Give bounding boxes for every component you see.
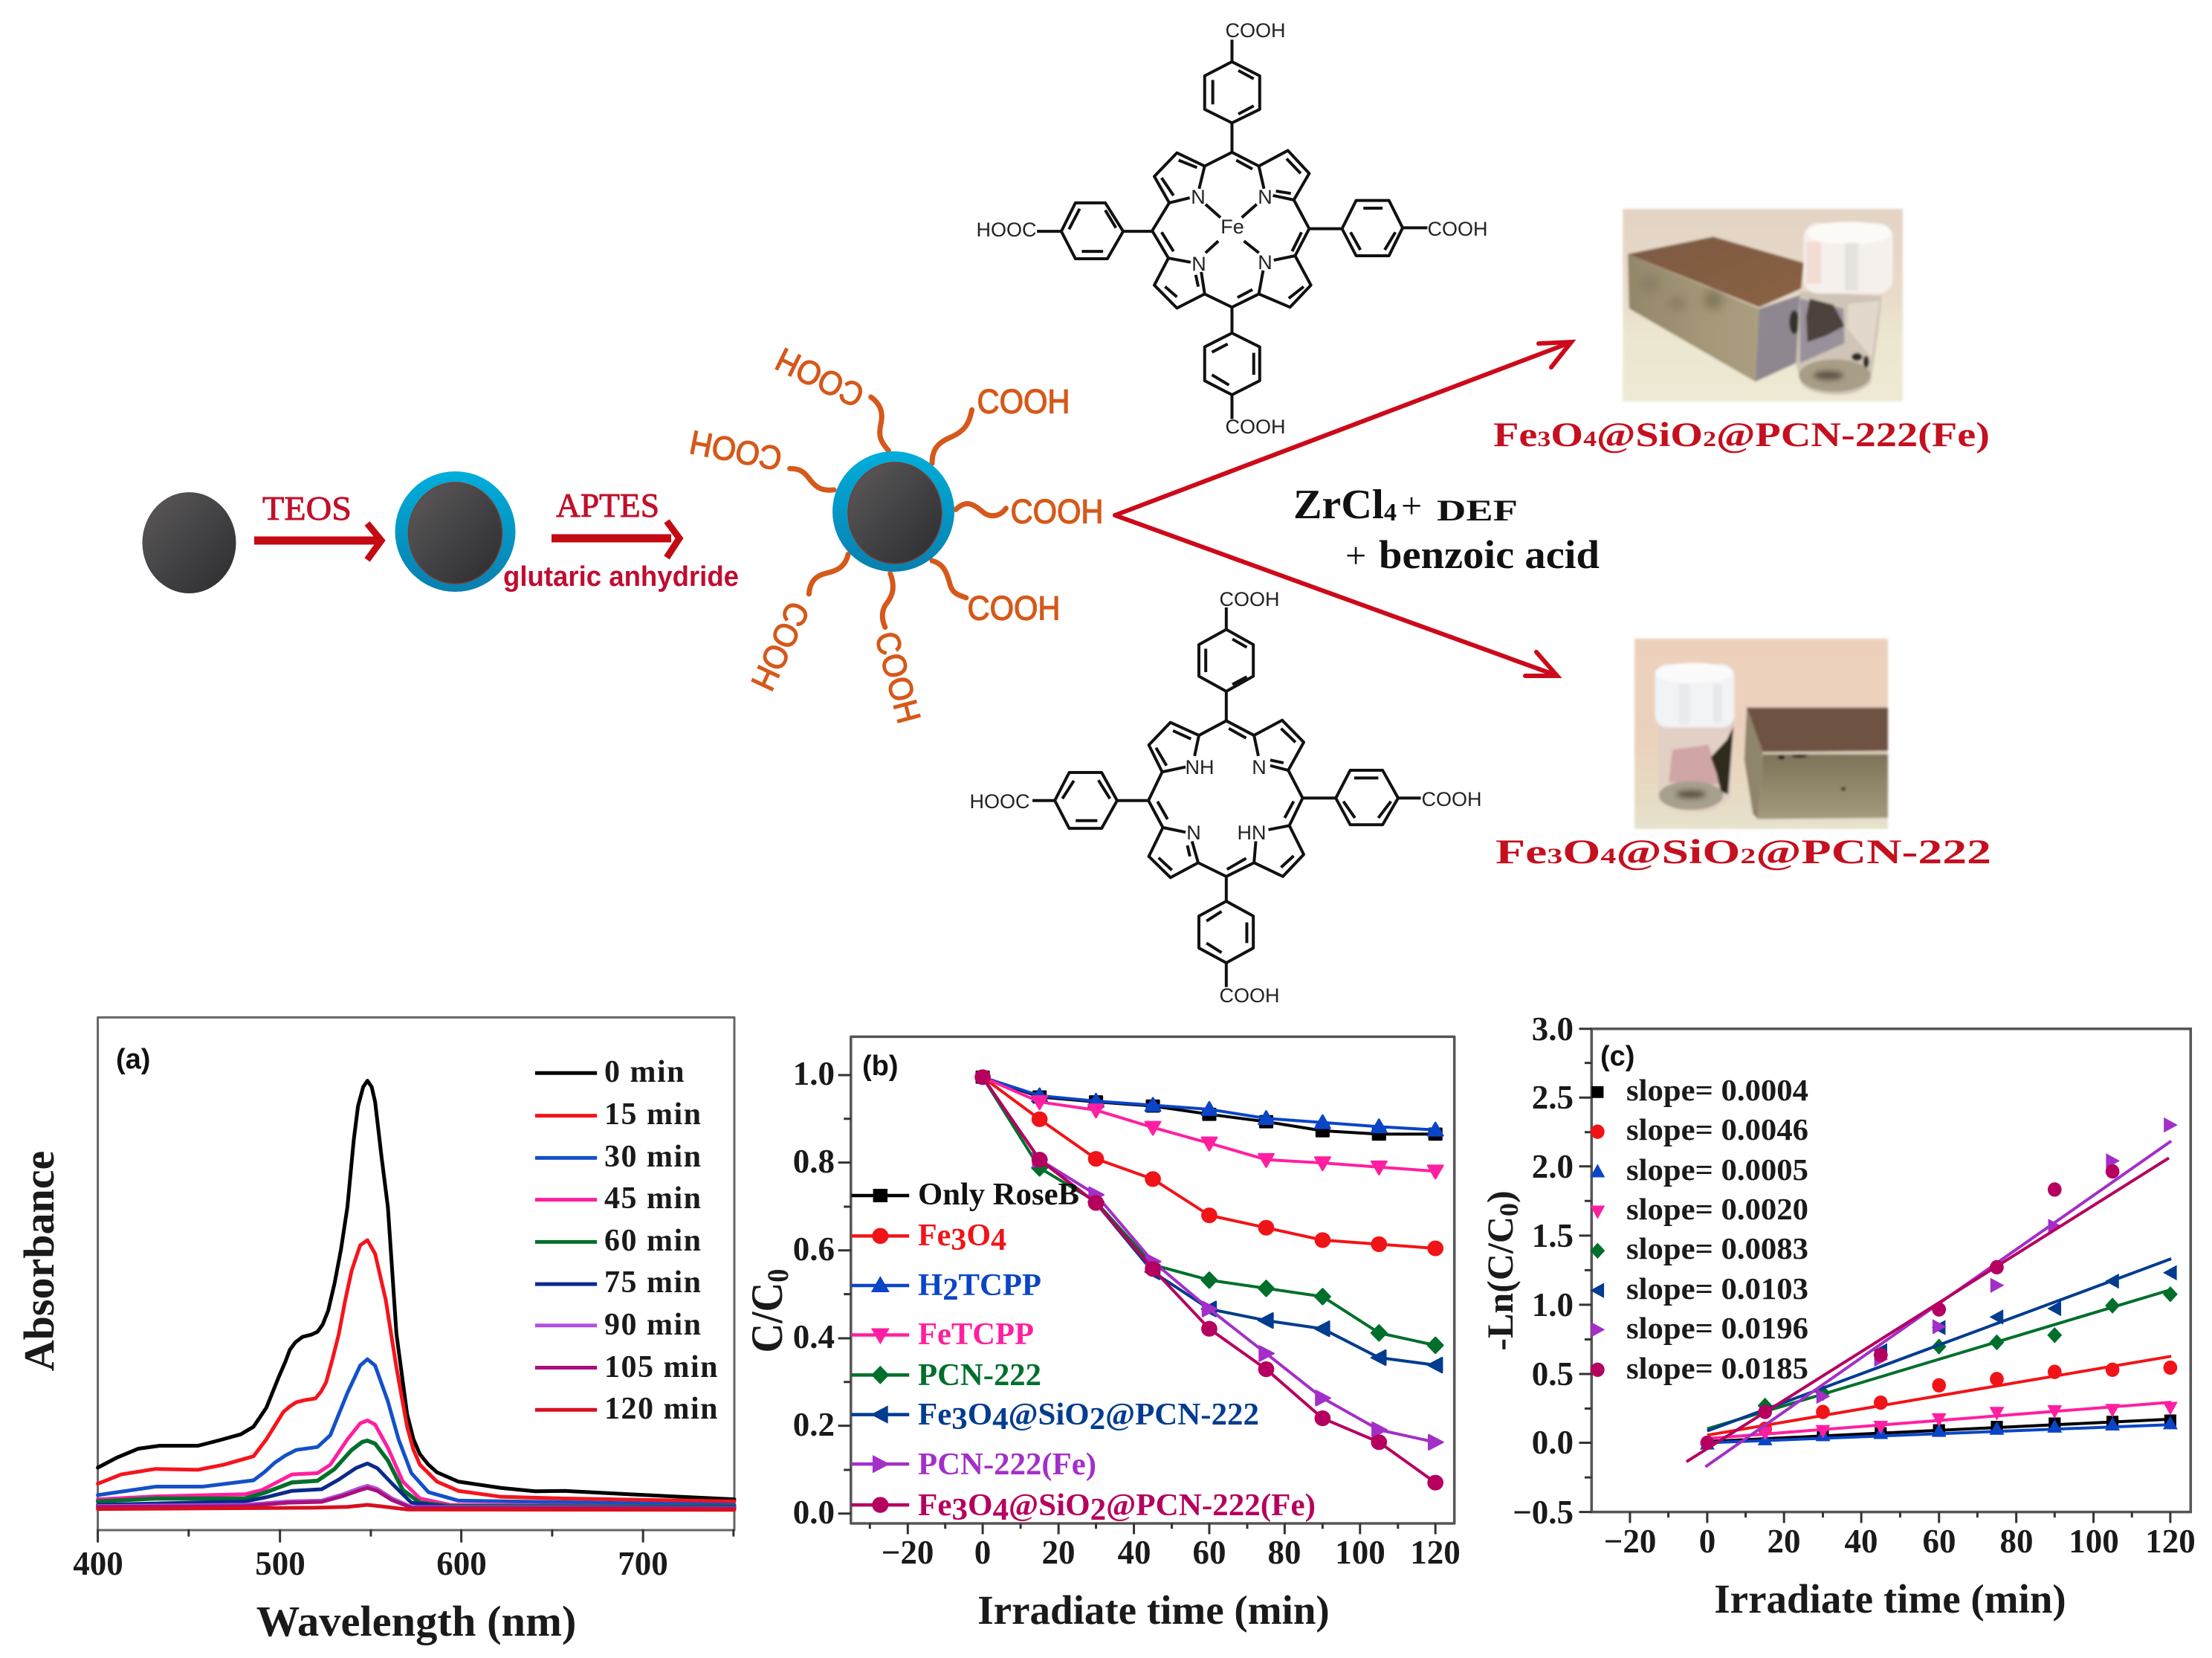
x tick labels (c) [1604, 1523, 2196, 1560]
legend: materials: 4 [991, 1223, 1006, 1257]
labels: FeTCPP atoms: Fe [1220, 216, 1244, 238]
legend: time series: 15 min [604, 1097, 702, 1132]
plot: fit lines, points and frame [1579, 1029, 2190, 1523]
tag: (b): (b) [862, 1051, 899, 1082]
arrow: branch up to Fe product [1115, 342, 1571, 515]
labels: FeTCPP atoms: HOOC [977, 219, 1036, 241]
x tick labels (c): 40 [1845, 1523, 1878, 1560]
legend: slopes: slope= 0.0004 [1626, 1073, 1808, 1107]
legend: materials [851, 1178, 1316, 1527]
legend: time series [535, 1055, 719, 1426]
chart (c): kinetics fit [1479, 1010, 2196, 1622]
x tick labels (b): 100 [1335, 1534, 1385, 1571]
legend: materials: O [968, 1488, 993, 1523]
x tick labels (c): 100 [2069, 1523, 2119, 1560]
x tick labels (b): −20 [882, 1534, 934, 1571]
x tick labels (b): 60 [1192, 1534, 1226, 1571]
arrow: branch down to metal-free product [1115, 515, 1557, 676]
labels: H2TCPP atoms: COOH [1421, 788, 1482, 810]
x tick labels (a): 700 [618, 1545, 668, 1582]
x tick labels (b): 20 [1042, 1534, 1075, 1571]
y tick labels (b): 0.8 [793, 1143, 835, 1180]
x tick labels (c): 80 [1999, 1523, 2034, 1560]
tag: (c): (c) [1600, 1041, 1634, 1072]
x tick labels (a) [73, 1545, 668, 1582]
legend: materials: O [966, 1219, 991, 1253]
text: COOH groups: COOH [770, 341, 870, 415]
x tick labels (a): 500 [255, 1545, 305, 1582]
legend: slopes: slope= 0.0185 [1626, 1351, 1808, 1385]
legend: time series: 105 min [604, 1350, 719, 1384]
text: reagents: benzoic acid [1379, 532, 1600, 577]
photo: Fe3O4@SiO2@PCN-222(Fe) with magnet [1623, 209, 1903, 401]
icon: Fe3O4 core particle [143, 492, 236, 593]
y tick labels (c): 1.0 [1532, 1286, 1574, 1323]
y tick labels (b) [793, 1055, 835, 1531]
y tick labels (c): 1.5 [1532, 1217, 1574, 1254]
x tick labels (c): 0 [1699, 1523, 1715, 1560]
labels: FeTCPP atoms: N [1258, 251, 1272, 274]
legend: materials: Only RoseB [918, 1178, 1079, 1212]
legend: slopes: slope= 0.0196 [1626, 1311, 1808, 1345]
x axis title (b): Irradiate time (min) [977, 1587, 1330, 1633]
arrow: APTES step [552, 521, 679, 558]
labels: FeTCPP atoms: N [1258, 186, 1272, 208]
y tick labels (c) [1513, 1010, 1574, 1531]
y tick labels (c): 2.0 [1532, 1148, 1574, 1185]
text: COOH groups: COOH [977, 382, 1070, 421]
legend: materials: @PCN-222 [1105, 1398, 1259, 1432]
y tick labels (c): 3.0 [1532, 1010, 1574, 1048]
legend: materials: 4 [993, 1493, 1009, 1527]
legend: slopes: slope= 0.0020 [1626, 1192, 1808, 1226]
x tick labels (a): 600 [436, 1545, 487, 1582]
legend: materials: 2 [1090, 1493, 1106, 1527]
molecule: FeTCPP [977, 19, 1488, 438]
y tick labels (c): −0.5 [1513, 1494, 1574, 1531]
text: COOH groups [687, 341, 1103, 727]
legend: slopes [1590, 1073, 1808, 1385]
plot: degradation curves and frame [838, 1036, 1455, 1534]
x tick labels (b): 40 [1118, 1534, 1151, 1571]
legend: materials: Fe [918, 1398, 951, 1432]
legend: materials: 2 [1090, 1402, 1105, 1436]
legend: materials: 3 [951, 1493, 968, 1527]
text: COOH groups: COOH [867, 628, 928, 727]
y axis title (a): Absorbance [15, 1151, 63, 1371]
y tick labels (b): 0.4 [793, 1318, 835, 1355]
label: TEOS: TEOS [262, 489, 352, 527]
legend: materials: FeTCPP [918, 1317, 1034, 1352]
panel: synthesis scheme [143, 341, 1600, 727]
arrow: TEOS step [254, 523, 381, 560]
labels: FeTCPP atoms: COOH [1225, 19, 1286, 42]
text: COOH groups: COOH [968, 589, 1060, 628]
text: COOH groups: COOH [1011, 492, 1103, 531]
chart (a): absorbance spectra [15, 1017, 734, 1645]
icon: carboxyl functionalised particle [687, 341, 1103, 727]
bonds: FeTCPP skeleton [1037, 39, 1427, 419]
legend: slopes: slope= 0.0005 [1626, 1152, 1808, 1187]
bonds: H2TCPP skeleton [1032, 607, 1421, 987]
text: reagents: + [1401, 485, 1422, 526]
legend: time series: 0 min [604, 1055, 685, 1089]
label: APTES: APTES [556, 486, 659, 524]
x tick labels (c): 120 [2145, 1523, 2196, 1560]
labels: FeTCPP atoms: N [1191, 186, 1206, 208]
x tick labels (b): 120 [1410, 1534, 1461, 1571]
y tick labels (b): 0.2 [793, 1406, 835, 1443]
x tick labels (b): 80 [1268, 1534, 1301, 1571]
x tick labels (c): −20 [1604, 1523, 1656, 1560]
legend: materials: 2 [942, 1273, 959, 1307]
x tick labels (b): 0 [974, 1534, 991, 1571]
y tick labels (c): 2.5 [1532, 1079, 1574, 1116]
legend: slopes: slope= 0.0103 [1626, 1271, 1808, 1306]
label: Fe3O4@SiO2@PCN-222: Fe 3O 4@SiO 2@PCN-222 [1495, 833, 1991, 871]
y tick labels (c): 0.5 [1532, 1355, 1574, 1393]
molecule: H2TCPP [969, 588, 1482, 1007]
legend: materials: PCN-222(Fe) [918, 1448, 1096, 1482]
legend: materials: O [968, 1398, 992, 1432]
chart (b): C/C0 vs irradiation time [743, 1036, 1461, 1633]
tag: (a): (a) [116, 1044, 150, 1075]
labels: H2TCPP atoms: N [1186, 822, 1201, 844]
y axis title (b): C/C [743, 1276, 792, 1353]
x tick labels (a): 400 [73, 1545, 123, 1582]
labels: H2TCPP atoms: HN [1237, 822, 1267, 844]
y axis title (c): -Ln(C/C [1479, 1216, 1521, 1351]
labels: H2TCPP atoms [969, 588, 1482, 1007]
legend: time series: 45 min [604, 1181, 702, 1216]
y axis title (c): ) [1479, 1190, 1521, 1203]
y axis title (c): 0 [1494, 1203, 1524, 1216]
labels: H2TCPP atoms: NH [1185, 756, 1215, 778]
text: reagents: 4 [1384, 499, 1397, 526]
legend: time series: 60 min [604, 1224, 702, 1258]
legend: slopes: slope= 0.0046 [1626, 1112, 1808, 1146]
legend: materials: @SiO [1009, 1488, 1090, 1523]
photo: Fe3O4@SiO2@PCN-222 with magnet [1634, 639, 1888, 829]
legend: materials: H [918, 1268, 942, 1303]
chains: wavy linkers [790, 397, 1006, 628]
label: Fe3O4@SiO2@PCN-222(Fe): Fe 3O4@SiO 2@PCN-222(Fe) [1493, 416, 1990, 454]
y axis title (b): 0 [761, 1268, 795, 1283]
legend: time series: 75 min [604, 1265, 702, 1300]
legend: time series: 120 min [604, 1392, 719, 1426]
labels: H2TCPP atoms: N [1252, 756, 1267, 778]
text: COOH groups: COOH [743, 596, 818, 696]
labels: H2TCPP atoms: COOH [1219, 984, 1280, 1007]
legend: materials: 4 [992, 1402, 1009, 1436]
labels: FeTCPP atoms: COOH [1427, 218, 1488, 240]
labels: FeTCPP atoms [977, 19, 1488, 438]
plot: spectra curves and frame [98, 1017, 734, 1541]
x axis title (a): Wavelength (nm) [256, 1597, 576, 1645]
labels: FeTCPP atoms: COOH [1225, 416, 1286, 438]
legend: materials: PCN-222 [918, 1358, 1041, 1393]
legend: materials: 3 [951, 1402, 968, 1436]
labels: H2TCPP atoms: COOH [1219, 588, 1280, 610]
labels: FeTCPP atoms: N [1191, 253, 1206, 275]
legend: slopes: slope= 0.0083 [1626, 1231, 1808, 1265]
legend: materials: TCPP [959, 1268, 1041, 1303]
labels: H2TCPP atoms: HOOC [969, 790, 1030, 813]
legend: time series: 90 min [604, 1308, 702, 1342]
label: glutaric anhydride: glutaric anhydride [503, 561, 739, 593]
legend: materials: @PCN-222(Fe) [1106, 1488, 1316, 1523]
legend: materials: @SiO [1009, 1398, 1090, 1432]
legend: materials: 3 [951, 1223, 966, 1257]
x tick labels (c): 20 [1768, 1523, 1800, 1560]
y tick labels (b): 0.0 [793, 1494, 835, 1531]
icon: silica coated particle [395, 471, 516, 592]
x tick labels (b) [882, 1534, 1461, 1571]
text: COOH groups: COOH [687, 423, 785, 478]
text: reagents [1293, 482, 1600, 577]
legend: materials: Fe [918, 1219, 951, 1253]
legend: time series: 30 min [604, 1140, 702, 1174]
text: reagents: + [1345, 535, 1366, 576]
text: reagents: ZrCl [1293, 482, 1384, 528]
text: reagents: DEF [1437, 494, 1518, 527]
x axis title (c): Irradiate time (min) [1714, 1576, 2066, 1622]
y tick labels (b): 0.6 [793, 1230, 835, 1268]
y tick labels (c): 0.0 [1532, 1424, 1574, 1461]
x tick labels (c): 60 [1922, 1523, 1956, 1560]
y tick labels (b): 1.0 [793, 1055, 835, 1092]
legend: materials: Fe [918, 1488, 951, 1523]
